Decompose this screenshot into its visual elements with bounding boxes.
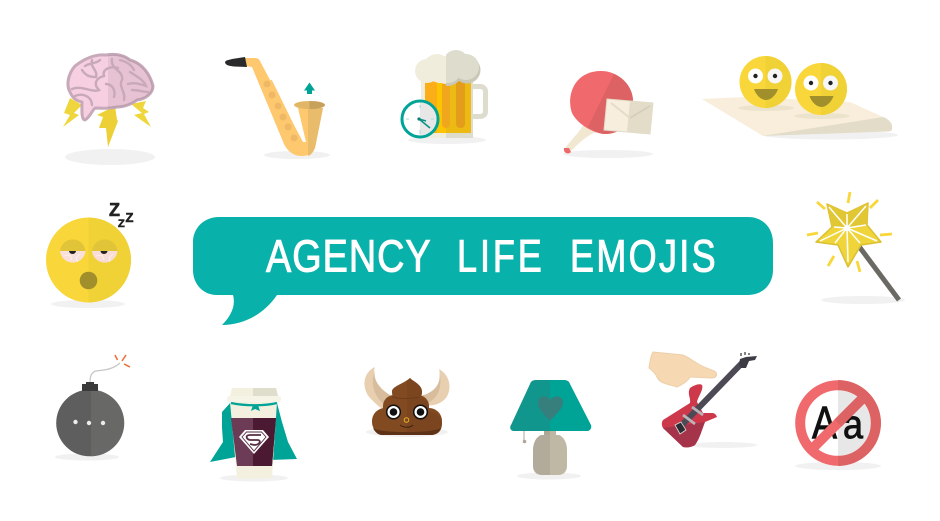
title text: EMOJIS <box>570 231 716 281</box>
icon: saxophone <box>225 57 330 159</box>
sleeping Zs: Z <box>118 218 125 230</box>
icon: sleepy face <box>46 200 134 308</box>
icon: no font sign <box>795 380 881 470</box>
title speech bubble <box>193 217 773 325</box>
icon: beer mug with clock <box>402 50 486 144</box>
sleeping Zs: Z <box>126 210 134 225</box>
sleeping Zs <box>109 200 134 230</box>
title text: LIFE <box>457 231 542 281</box>
cape <box>210 402 297 462</box>
icon: right smiley <box>795 63 847 115</box>
icon: ping pong paddle with envelope <box>563 71 653 158</box>
title text <box>266 230 716 281</box>
font specimen text <box>812 397 864 448</box>
superman shield <box>239 430 269 454</box>
font specimen text: A <box>812 397 837 448</box>
font specimen text: a <box>843 403 864 447</box>
icon: left smiley <box>740 56 792 108</box>
icon: two smiley faces on a paper <box>702 56 898 140</box>
icon: poop with horns <box>364 367 449 437</box>
title text: AGENCY <box>266 230 431 281</box>
sleeping Zs: Z <box>109 200 120 220</box>
icon: envelope <box>604 99 653 134</box>
icon: pointing hand <box>649 352 716 387</box>
icon: clock <box>402 101 438 137</box>
icon: magic wand star <box>807 192 905 304</box>
icon: pointing hand and guitar <box>649 352 757 448</box>
infographic canvas <box>46 50 905 482</box>
icon: super coffee cup with cape <box>210 388 297 482</box>
icon: electric guitar <box>662 352 757 447</box>
icon: lamp with heart <box>510 380 591 480</box>
icon: up arrow <box>304 82 315 94</box>
icon: brain with lightning <box>63 54 155 165</box>
icon: bomb <box>55 355 130 460</box>
